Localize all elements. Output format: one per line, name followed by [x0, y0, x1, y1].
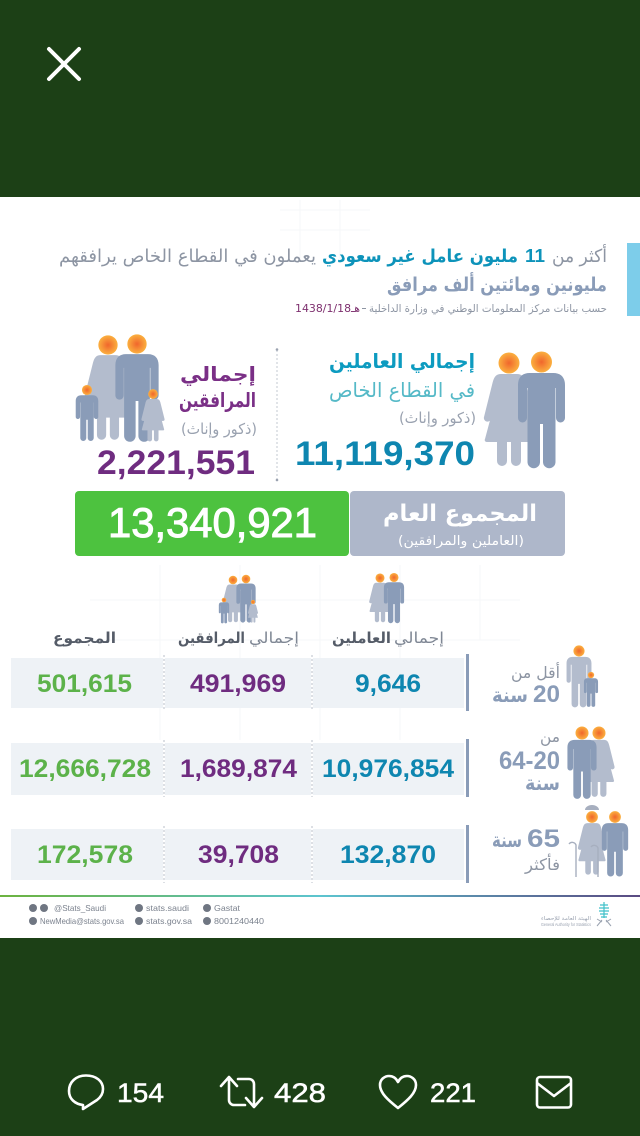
footer contacts: Gastat	[214, 903, 241, 913]
table row: 65 and over: 39,708	[198, 841, 279, 869]
reply count: 154	[117, 1078, 164, 1108]
table row: 65 and over: 172,578	[37, 841, 133, 869]
heading: 11	[525, 246, 545, 266]
panel: dependants total: إجمالي	[180, 362, 256, 387]
icon: workers small	[369, 573, 404, 623]
age label: under 20: سنة	[492, 683, 528, 707]
table row: 20 to 64: 12,666,728	[19, 755, 151, 783]
infographic card	[0, 197, 640, 938]
panel: grand total label: المجموع العام	[383, 501, 537, 527]
heading: أكثر من	[552, 244, 607, 267]
age label: 65 plus	[492, 825, 560, 875]
icon: retweet	[221, 1077, 262, 1107]
heading	[59, 244, 607, 296]
age label: 20 to 64: من	[540, 727, 560, 747]
logo: statistics authority	[541, 902, 611, 927]
heading: يعملون في القطاع الخاص يرافقهم	[59, 246, 316, 267]
icon: workers pair	[484, 352, 565, 468]
age label: under 20: أقل من	[511, 662, 560, 683]
panel: grand total label: (العاملين والمرافقين)	[398, 534, 524, 549]
footer contacts	[29, 903, 264, 926]
logo: statistics authority: الهيئة العامة للإحصاء	[541, 916, 591, 922]
app header band	[0, 0, 640, 197]
icon: close	[49, 49, 79, 79]
icon: reply	[69, 1076, 103, 1109]
table row: 20 to 64	[11, 739, 469, 797]
icon: heart	[380, 1076, 416, 1108]
icon: adult pair	[567, 726, 615, 799]
age label: 65 plus: سنة	[492, 828, 522, 852]
heading: مليون عامل غير سعودي	[322, 246, 518, 267]
footer contacts: stats.gov.sa	[146, 916, 192, 926]
panel: grand total value	[75, 491, 349, 556]
age label: 65 plus: فأكثر	[524, 853, 560, 875]
panel: workers total: (ذكور وإناث)	[399, 409, 476, 427]
footer contacts: NewMedia@stats.gov.sa	[40, 916, 124, 926]
footer contacts: 8001240440	[214, 916, 264, 926]
panel: workers total	[295, 349, 476, 473]
column heading: total: المجموع	[53, 629, 116, 647]
table row: 20 to 64: 10,976,854	[322, 755, 454, 783]
panel: workers total: 11,119,370	[295, 435, 475, 473]
column heading: dependants: إجمالي	[249, 629, 299, 648]
heading: مليونين ومائتين ألف مرافق	[387, 272, 607, 296]
age label: under 20	[492, 662, 560, 708]
icon: mail	[537, 1077, 571, 1108]
table row: under 20	[11, 654, 469, 711]
like count: 221	[430, 1078, 476, 1108]
age label: under 20: 20	[533, 681, 560, 708]
source note: 1438/1/18هـ	[295, 303, 360, 315]
column heading: workers: العاملين	[332, 629, 391, 647]
accent bar	[627, 243, 640, 316]
icon: dependants family	[76, 334, 165, 442]
source note: حسب بيانات مركز المعلومات الوطني في وزارة الداخلية	[369, 303, 607, 315]
footer contacts: stats.saudi	[146, 903, 189, 913]
logo: statistics authority: General Authority for Statistics	[541, 922, 592, 927]
icon: elderly pair	[569, 805, 628, 877]
icon: adult and child	[567, 645, 598, 707]
footer contacts: @Stats_Saudi	[54, 903, 106, 913]
table row: 65 and over	[11, 825, 469, 883]
panel: workers total: إجمالي العاملين	[329, 349, 475, 374]
app footer band	[0, 938, 640, 1136]
table row: 20 to 64: 1,689,874	[180, 755, 297, 783]
age label: 20 to 64	[499, 727, 560, 795]
table row: under 20: 491,969	[190, 670, 286, 698]
panel: grand total label	[350, 491, 565, 556]
column heading: dependants: المرافقين	[178, 629, 245, 647]
panel: dependants total: 2,221,551	[97, 444, 255, 482]
panel: dependants total	[97, 362, 257, 482]
panel: workers total: في القطاع الخاص	[329, 378, 475, 403]
age label: 20 to 64: 64-20	[499, 747, 560, 775]
panel: grand total value: 13,340,921	[108, 499, 317, 546]
table row: under 20: 501,615	[37, 670, 132, 698]
footer gradient rule	[0, 895, 640, 897]
column heading: workers: إجمالي	[394, 629, 444, 648]
table row: 65 and over: 132,870	[340, 841, 436, 869]
table row: under 20: 9,646	[355, 670, 421, 698]
divider	[276, 348, 278, 481]
age label: 20 to 64: سنة	[525, 771, 560, 795]
age label: 65 plus: 65	[527, 825, 560, 853]
column heading: workers	[332, 629, 444, 648]
retweet count: 428	[274, 1078, 326, 1108]
panel: dependants total: المرافقين	[179, 388, 256, 412]
icon: dependants small	[219, 575, 258, 623]
panel: dependants total: (ذكور وإناث)	[181, 420, 257, 438]
column heading: dependants	[178, 629, 299, 648]
